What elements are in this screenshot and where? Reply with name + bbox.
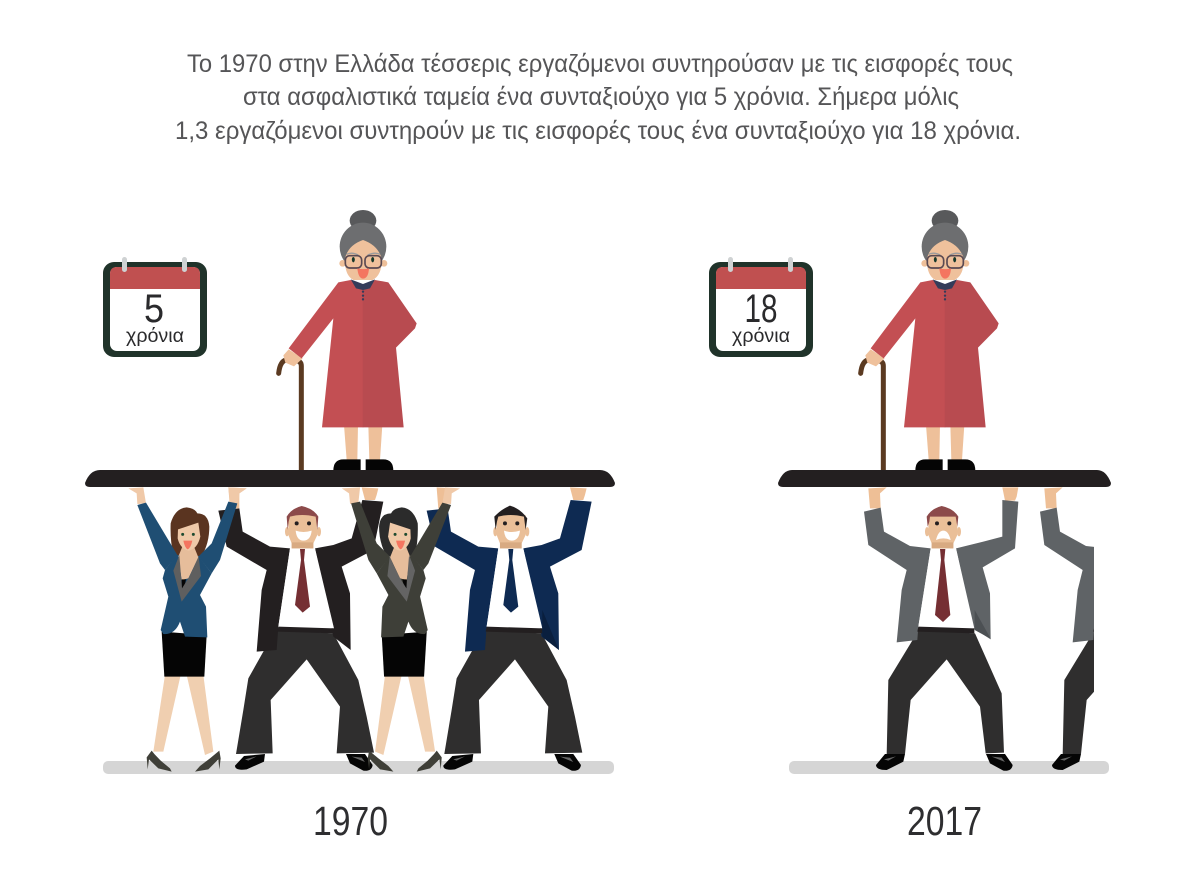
woman in blue jacket xyxy=(128,487,247,772)
woman in olive jacket xyxy=(342,487,460,772)
ground shadow 2017 xyxy=(789,761,1109,774)
panel: 1970 xyxy=(85,210,615,844)
pensioner 2017 xyxy=(861,210,999,471)
calendar: 5 years xyxy=(103,257,207,357)
year label 1970: 1970 xyxy=(313,798,388,844)
panel: 2017 xyxy=(709,210,1111,836)
calendar: 18 years: χρόνια xyxy=(732,326,790,347)
man in navy suit xyxy=(427,487,592,771)
partial man in grey suit xyxy=(1040,487,1094,770)
title text: Το 1970 στην Ελλάδα τέσσερις εργαζόμενοι συντηρούσαν με τις εισφορές τους xyxy=(187,50,1013,78)
calendar: 5 years: χρόνια xyxy=(126,326,184,347)
calendar: 18 years: 18 xyxy=(744,287,778,331)
calendar: 5 years: 5 xyxy=(144,287,164,331)
year label 2017: 2017 xyxy=(907,798,982,844)
title text: 1,3 εργαζόμενοι συντηρούν με τις εισφορές τους ένα συνταξιούχο για 18 χρόνια. xyxy=(175,117,1021,145)
platform 1970 xyxy=(85,470,615,487)
man in grey suit xyxy=(864,487,1018,771)
title text: στα ασφαλιστικά ταμεία ένα συνταξιούχο για 5 χρόνια. Σήμερα μόλις xyxy=(243,83,959,111)
title text xyxy=(175,50,1021,145)
man in black suit xyxy=(218,487,383,771)
pensioner 1970 xyxy=(279,210,417,471)
platform 2017 xyxy=(778,470,1111,487)
calendar: 18 years xyxy=(709,257,813,357)
ground shadow 1970 xyxy=(103,761,614,774)
